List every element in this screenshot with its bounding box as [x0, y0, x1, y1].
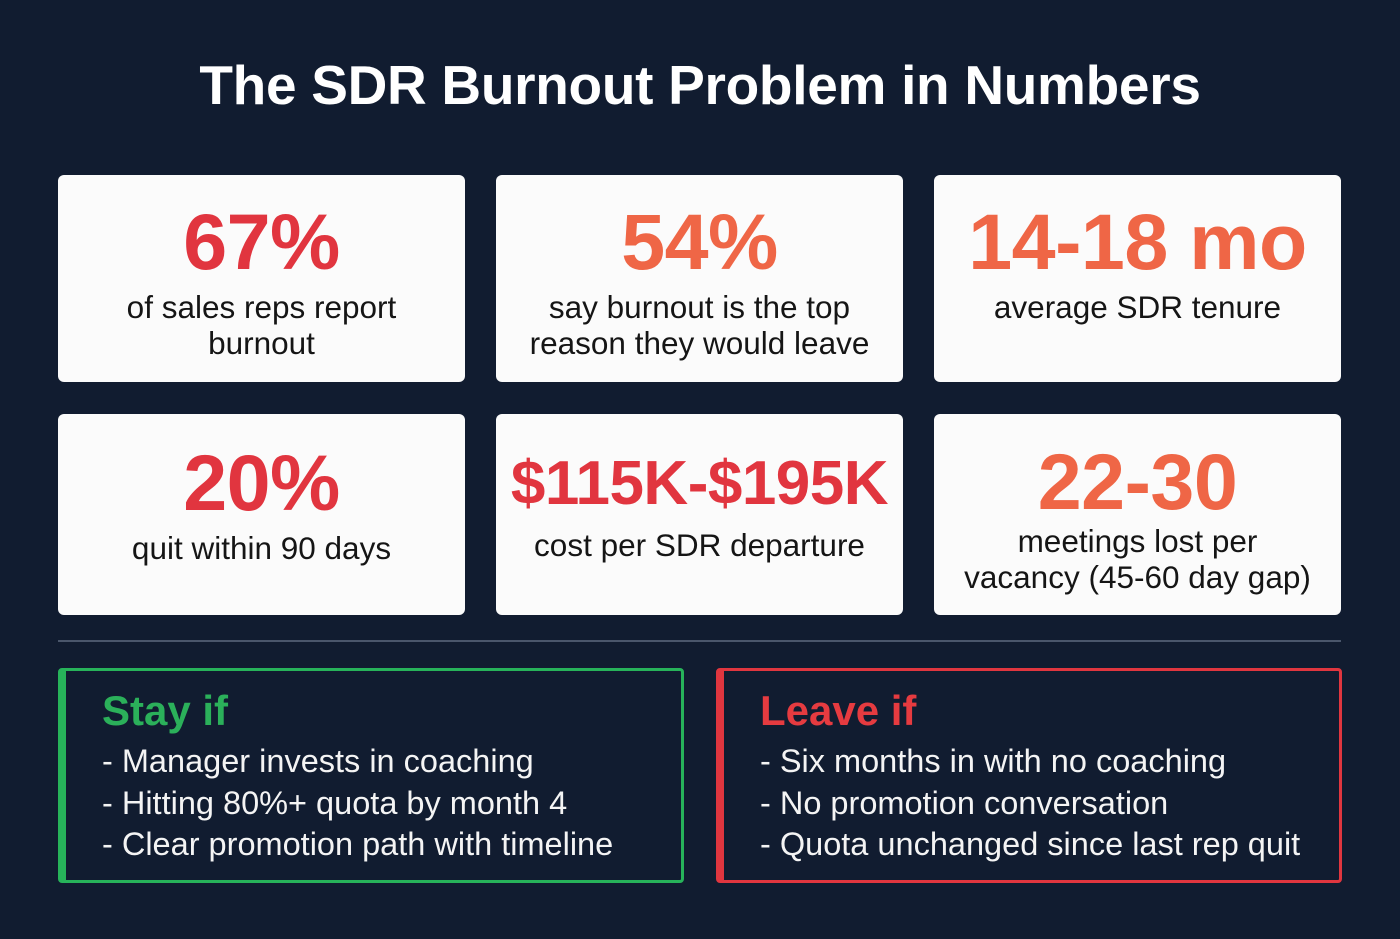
heading: leave if: Leave if — [760, 687, 916, 734]
card: 22-30: meetings lost per — [1018, 523, 1257, 559]
card: cost — [496, 414, 903, 615]
card: 54%: say burnout is the top — [549, 289, 850, 325]
card: cost: cost per SDR departure — [534, 527, 865, 563]
card: 54% — [496, 175, 903, 382]
title: The SDR Burnout Problem in Numbers — [199, 54, 1201, 116]
card: 67%: of sales reps report — [127, 289, 396, 325]
list: stay reasons: - Hitting 80%+ quota by month 4 — [102, 784, 567, 820]
list: leave reasons — [760, 743, 1300, 862]
list: stay reasons: - Manager invests in coaching — [102, 743, 534, 779]
list: leave reasons: - Quota unchanged since last rep quit — [760, 826, 1300, 862]
panel: leave if — [716, 668, 1342, 883]
card: cost: $115K-$195K — [511, 449, 888, 518]
list: stay reasons — [102, 743, 613, 862]
card: 67% — [58, 175, 465, 382]
card: 14-18 mo — [934, 175, 1341, 382]
list: leave reasons: - No promotion conversation — [760, 784, 1168, 820]
card: 67%: 67% — [183, 197, 340, 286]
card: 67%: burnout — [208, 325, 315, 361]
card: 14-18 mo: 14-18 mo — [968, 197, 1307, 286]
card: 20%: 20% — [183, 438, 340, 527]
card: 22-30: 22-30 — [1038, 437, 1237, 526]
list: stay reasons: - Clear promotion path with timeline — [102, 826, 613, 862]
list: leave reasons: - Six months in with no coaching — [760, 743, 1226, 779]
card: 22-30 — [934, 414, 1341, 615]
card: 54%: 54% — [621, 197, 778, 286]
card: 14-18 mo: average SDR tenure — [994, 289, 1281, 325]
card: 20%: quit within 90 days — [132, 530, 391, 566]
panel: stay if — [58, 668, 684, 883]
card: 22-30: vacancy (45-60 day gap) — [964, 559, 1311, 595]
card: 20% — [58, 414, 465, 615]
card: 54%: reason they would leave — [530, 325, 869, 361]
heading: stay if: Stay if — [102, 687, 228, 734]
